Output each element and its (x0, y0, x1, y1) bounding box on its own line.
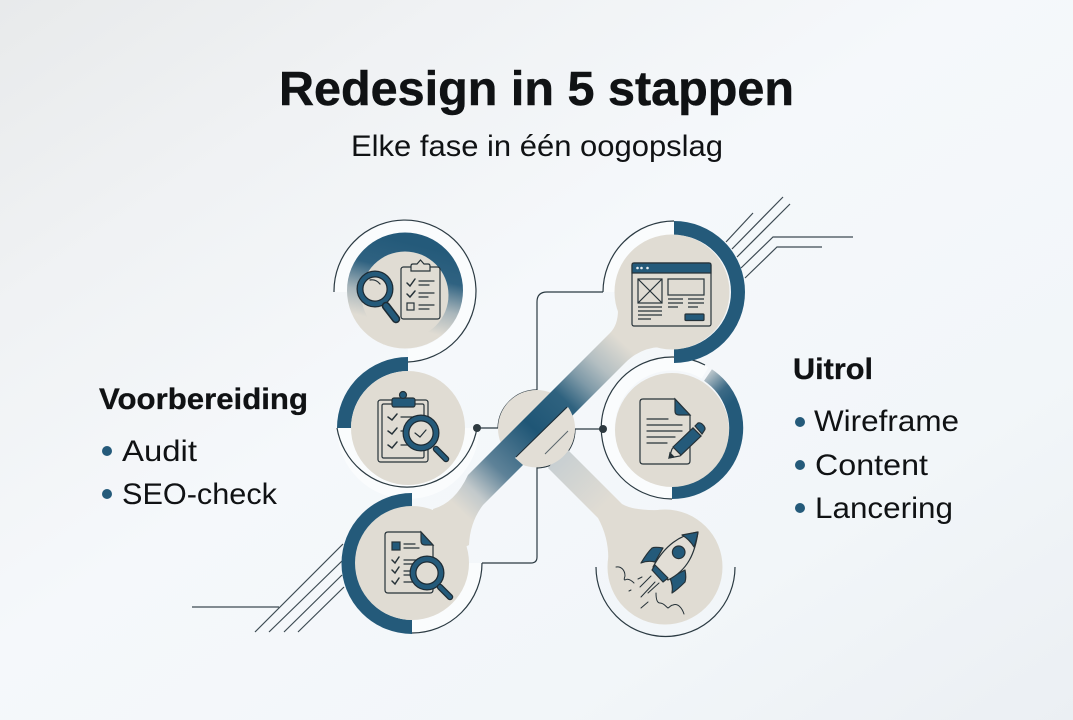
progress ring (674, 228, 738, 356)
list item: SEO-check: SEO-check (122, 478, 278, 511)
rim highlight (412, 563, 475, 626)
heading: Uitrol: Uitrol (793, 353, 873, 386)
decorative lines: top right (726, 197, 853, 278)
list item: Content: Content (815, 449, 929, 482)
connector dot (473, 424, 481, 432)
icon: document with magnifier (385, 532, 450, 597)
progress ring (344, 364, 408, 428)
step 5: content (599, 357, 736, 499)
connector band: hub to rocket (548, 447, 660, 567)
heading: Voorbereiding: Voorbereiding (99, 383, 308, 416)
hub lower half (515, 407, 575, 467)
progress ring (348, 500, 412, 627)
inner disc (362, 252, 448, 338)
subtitle: Elke fase in één oogopslag (351, 130, 723, 163)
icon: clipboard with magnifier (360, 260, 440, 319)
outline arc (337, 428, 477, 487)
step 3: content audit (348, 500, 482, 633)
step 4: wireframe (603, 221, 738, 356)
central hub (498, 390, 575, 467)
connector lines (477, 292, 603, 563)
icon: document with pencil (640, 399, 705, 464)
icon: clipboard with check and magnifier (378, 392, 446, 462)
rim highlight (341, 227, 469, 355)
text block: Uitrol (793, 353, 959, 525)
step 6: launch (596, 510, 735, 636)
rim highlight (344, 428, 472, 492)
connector band: diagonal (433, 300, 670, 560)
list item: Wireframe: Wireframe (814, 405, 959, 438)
outline arc (596, 567, 735, 636)
inner disc (355, 506, 469, 620)
inner disc (615, 373, 729, 487)
outline arc (334, 220, 476, 362)
outline arc (603, 221, 674, 292)
list item: Lancering: Lancering (815, 492, 953, 525)
outline arc (412, 563, 482, 633)
inner disc (608, 510, 722, 624)
text block: Voorbereiding (99, 383, 308, 511)
icon: browser wireframe (632, 263, 711, 326)
rim highlight (608, 364, 705, 492)
step 2: checklist (337, 364, 481, 492)
inner disc (614, 234, 730, 350)
inner disc (351, 371, 465, 485)
list item: Audit: Audit (122, 435, 198, 468)
decorative lines: bottom left (192, 544, 344, 632)
progress ring (672, 375, 736, 492)
icon: rocket (616, 532, 698, 614)
progress ring (347, 232, 463, 348)
step 1: audit (334, 220, 476, 362)
outline arc (601, 357, 705, 499)
connector dot (599, 425, 607, 433)
title: Redesign in 5 stappen (279, 63, 794, 116)
rim highlight (610, 228, 674, 292)
